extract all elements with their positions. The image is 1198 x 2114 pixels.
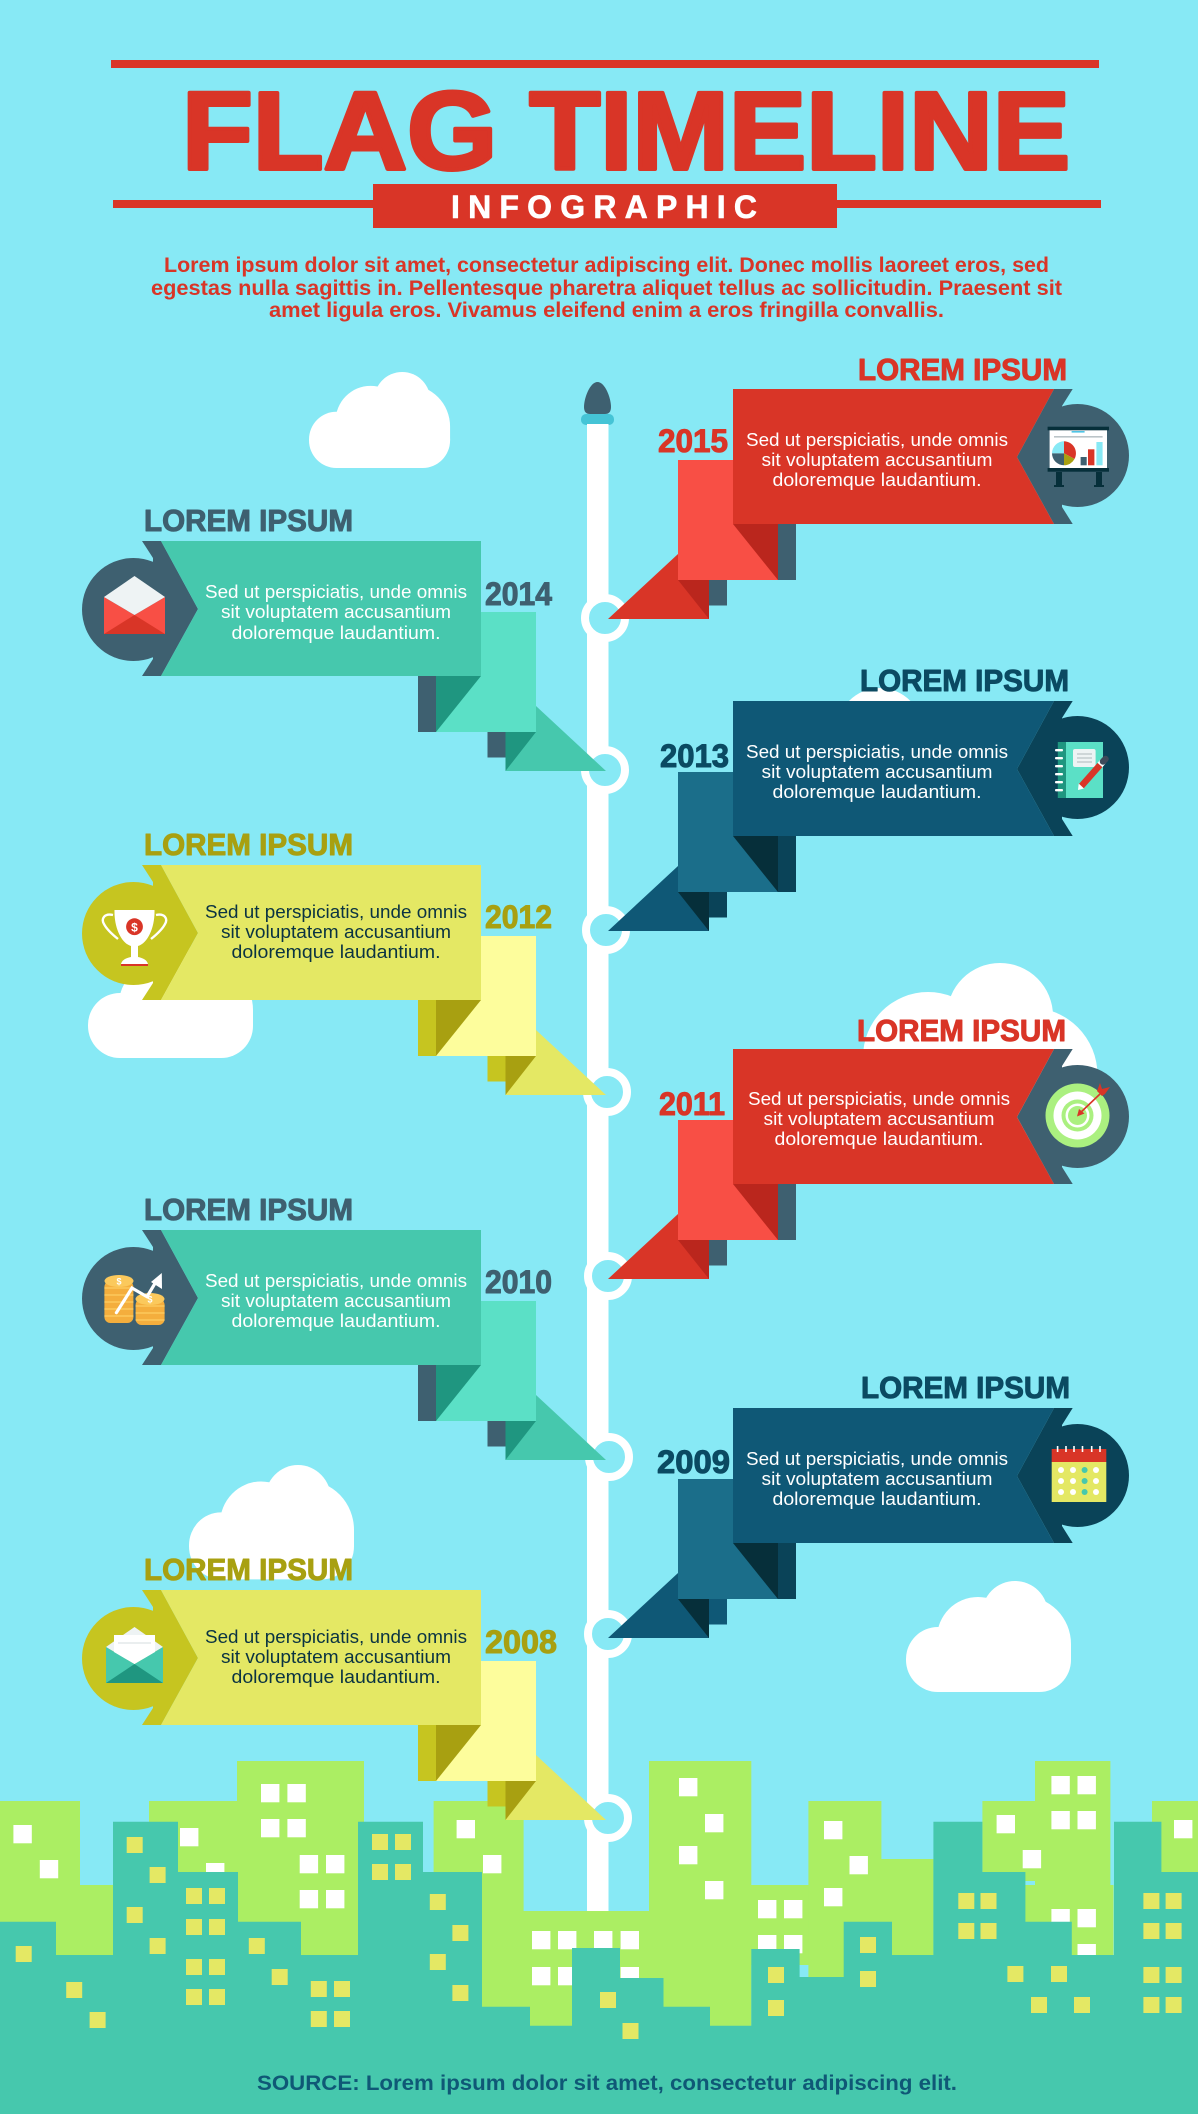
banner text: Sed ut perspiciatis, unde omnis bbox=[746, 742, 1008, 762]
year: 2010 bbox=[485, 1264, 552, 1300]
pole cap bbox=[581, 414, 614, 425]
banner bbox=[161, 1230, 481, 1365]
heading: LOREM IPSUM bbox=[144, 503, 353, 538]
banner bbox=[733, 1408, 1054, 1543]
header bbox=[111, 60, 1101, 322]
banner bbox=[733, 389, 1054, 524]
icon: trophy: $ bbox=[131, 920, 138, 934]
icon: notebook and pencil bbox=[1055, 742, 1106, 798]
icon badge backing bbox=[82, 541, 198, 676]
icon badge backing bbox=[1017, 1408, 1129, 1543]
banner text bbox=[205, 1627, 467, 1687]
year: 2009 bbox=[657, 1444, 730, 1480]
banner text: sit voluptatem accusantium bbox=[764, 1109, 994, 1129]
banner text: doloremque laudantium. bbox=[232, 623, 440, 643]
flag: 2008 bbox=[82, 1552, 606, 1820]
banner text: Sed ut perspiciatis, unde omnis bbox=[746, 1449, 1008, 1469]
flag: 2013 bbox=[608, 663, 1129, 931]
heading: LOREM IPSUM bbox=[858, 352, 1067, 387]
banner text: sit voluptatem accusantium bbox=[762, 762, 992, 782]
heading: LOREM IPSUM bbox=[144, 1552, 353, 1587]
title top rule bbox=[111, 60, 1099, 68]
banner text bbox=[746, 742, 1008, 802]
banner text: Sed ut perspiciatis, unde omnis bbox=[205, 1271, 467, 1291]
pole shaft bbox=[587, 424, 608, 1914]
year: 2011 bbox=[659, 1086, 725, 1122]
flag tail bbox=[608, 772, 796, 931]
banner text: Sed ut perspiciatis, unde omnis bbox=[205, 902, 467, 922]
back building windows bbox=[13, 1776, 1192, 1985]
icon: coins and rising arrow: $ bbox=[116, 1276, 122, 1286]
banner text: sit voluptatem accusantium bbox=[762, 1469, 992, 1489]
banner bbox=[161, 541, 481, 676]
back buildings bbox=[0, 1761, 1198, 2031]
icon badge backing bbox=[1017, 701, 1129, 836]
banner text bbox=[748, 1089, 1010, 1149]
banner text bbox=[205, 902, 467, 962]
year: 2008 bbox=[485, 1624, 557, 1660]
front buildings bbox=[0, 1822, 1198, 2114]
banner text: doloremque laudantium. bbox=[772, 782, 982, 802]
banner text: Sed ut perspiciatis, unde omnis bbox=[746, 430, 1008, 450]
city skyline bbox=[0, 1761, 1198, 2114]
icon: target with arrow bbox=[1046, 1083, 1110, 1148]
flag tail bbox=[608, 1120, 796, 1279]
banner text: sit voluptatem accusantium bbox=[221, 1291, 451, 1311]
icon: presentation board bbox=[1048, 427, 1109, 487]
banner text: doloremque laudantium. bbox=[232, 1311, 440, 1331]
flag tail bbox=[418, 1301, 606, 1460]
banner text: sit voluptatem accusantium bbox=[221, 602, 451, 622]
pole tip bbox=[584, 382, 611, 414]
banner text: sit voluptatem accusantium bbox=[762, 450, 992, 470]
year: 2014 bbox=[485, 576, 552, 612]
flag: 2010 bbox=[82, 1192, 606, 1460]
icon badge backing bbox=[82, 1230, 198, 1365]
flag tail bbox=[418, 936, 606, 1095]
icon badge backing bbox=[82, 1590, 198, 1725]
banner text: sit voluptatem accusantium bbox=[221, 922, 451, 942]
banner bbox=[733, 1049, 1054, 1184]
year: 2012 bbox=[485, 899, 552, 935]
intro paragraph: Lorem ipsum dolor sit amet, consectetur adipiscing elit. Donec mollis laoreet eros, sed bbox=[164, 254, 1049, 277]
intro paragraph: amet ligula eros. Vivamus eleifend enim a eros fringilla convallis. bbox=[269, 299, 944, 322]
banner text: Sed ut perspiciatis, unde omnis bbox=[748, 1089, 1010, 1109]
flag: 2011 bbox=[608, 1013, 1129, 1279]
banner bbox=[733, 701, 1054, 836]
flag: 2009 bbox=[608, 1370, 1129, 1638]
banner text bbox=[746, 1449, 1008, 1509]
icon: calendar bbox=[1052, 1446, 1106, 1502]
banner text: Sed ut perspiciatis, unde omnis bbox=[205, 582, 467, 602]
banner text: sit voluptatem accusantium bbox=[221, 1647, 451, 1667]
banner text bbox=[205, 582, 467, 643]
intro paragraph: egestas nulla sagittis in. Pellentesque pharetra aliquet tellus ac sollicitudin. Praesent sit bbox=[151, 277, 1062, 300]
source line: SOURCE: Lorem ipsum dolor sit amet, consectetur adipiscing elit. bbox=[257, 2072, 957, 2095]
subtitle: INFOGRAPHIC bbox=[451, 189, 757, 225]
front building windows bbox=[16, 1834, 1182, 2039]
icon: coins and rising arrow bbox=[104, 1273, 165, 1325]
icon badge backing bbox=[1017, 389, 1129, 524]
cloud: behind 2011 bbox=[863, 963, 1098, 1142]
flag: 2012 bbox=[82, 827, 606, 1095]
cloud: lower right bbox=[906, 1581, 1071, 1692]
banner bbox=[161, 1590, 481, 1725]
heading: LOREM IPSUM bbox=[861, 1370, 1070, 1405]
subtitle banner bbox=[373, 184, 837, 228]
banner text: doloremque laudantium. bbox=[232, 942, 440, 962]
icon: closed envelope bbox=[104, 576, 165, 634]
subtitle rule bbox=[113, 200, 1101, 208]
heading: LOREM IPSUM bbox=[144, 827, 353, 862]
heading: LOREM IPSUM bbox=[857, 1013, 1066, 1048]
clouds bbox=[88, 372, 1098, 1692]
banner text bbox=[205, 1271, 467, 1331]
icon: trophy bbox=[103, 910, 166, 966]
heading: LOREM IPSUM bbox=[860, 663, 1069, 698]
timeline rings bbox=[585, 598, 629, 1838]
cloud: behind 2008 bbox=[189, 1465, 354, 1579]
banner text: Sed ut perspiciatis, unde omnis bbox=[205, 1627, 467, 1647]
year: 2015 bbox=[658, 423, 728, 459]
icon: open envelope with letter bbox=[106, 1627, 163, 1683]
title: FLAG TIMELINE bbox=[182, 70, 1070, 193]
banner bbox=[161, 865, 481, 1000]
icon: coins and rising arrow: $ bbox=[147, 1294, 153, 1304]
flag tail bbox=[418, 1661, 606, 1820]
banner text: doloremque laudantium. bbox=[772, 470, 982, 490]
intro paragraph bbox=[151, 254, 1062, 322]
banner text bbox=[746, 430, 1008, 490]
flag pole bbox=[581, 382, 629, 1914]
icon badge backing bbox=[82, 865, 198, 1000]
cloud: upper left bbox=[309, 372, 450, 468]
year: 2013 bbox=[660, 738, 729, 774]
cloud: behind 2013 bbox=[738, 688, 952, 832]
cloud: behind 2012 bbox=[88, 947, 253, 1058]
banner text: doloremque laudantium. bbox=[774, 1129, 984, 1149]
banner text: doloremque laudantium. bbox=[232, 1667, 440, 1687]
flag: 2015 bbox=[608, 352, 1129, 619]
icon badge backing bbox=[1017, 1049, 1129, 1184]
flag: 2014 bbox=[82, 503, 606, 771]
flag tail bbox=[418, 612, 606, 771]
heading: LOREM IPSUM bbox=[144, 1192, 353, 1227]
flag tail bbox=[608, 460, 796, 619]
banner text: doloremque laudantium. bbox=[772, 1489, 982, 1509]
flag tail bbox=[608, 1479, 796, 1638]
